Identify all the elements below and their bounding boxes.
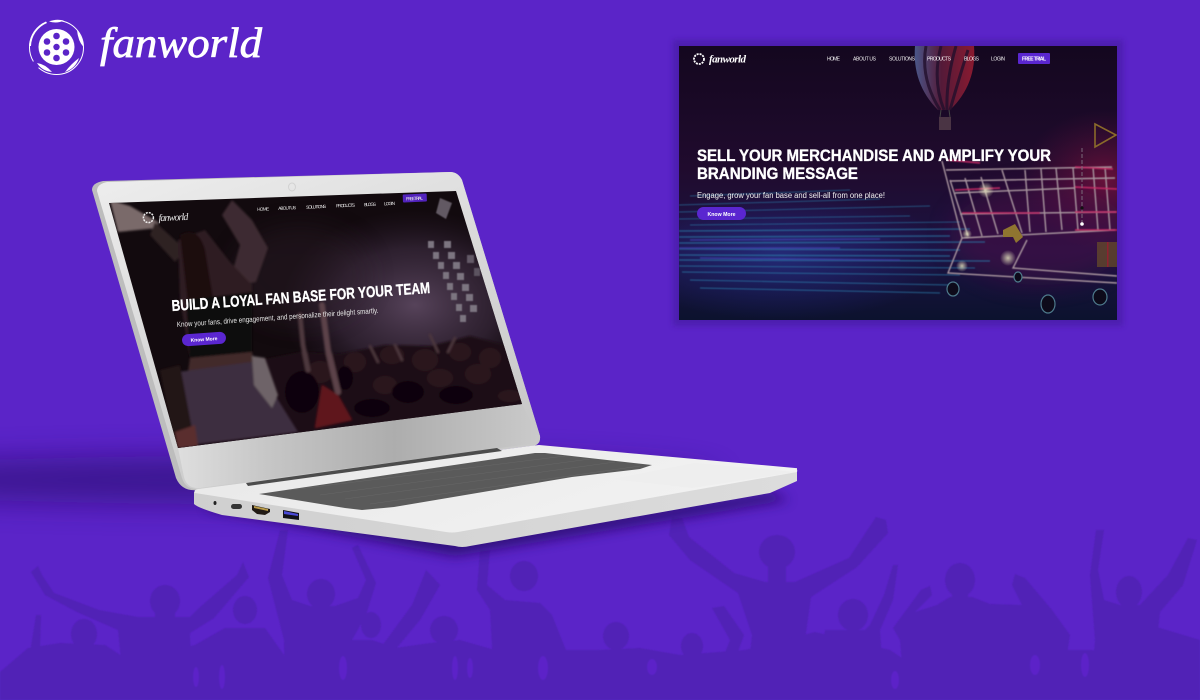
icon: film reel bbox=[29, 20, 84, 74]
black top bbox=[186, 292, 252, 358]
banner heading: SELL YOUR MERCHANDISE AND AMPLIFY YOUR bbox=[697, 147, 1051, 165]
shirt bbox=[178, 362, 298, 445]
laptop know more button: Know More bbox=[190, 336, 218, 344]
laptop site logo: fanworld bbox=[158, 212, 190, 224]
laptop site nav: LOGIN bbox=[384, 201, 395, 206]
banner nav: ABOUT US bbox=[853, 56, 877, 62]
laptop hero subtitle: Know your fans, drive engagement, and personalize their delight smartly. bbox=[177, 306, 379, 329]
flag bbox=[110, 200, 158, 232]
laptop know more button bbox=[182, 331, 226, 347]
banner free trial button: FREE TRIAL bbox=[1022, 56, 1046, 62]
banner nav: BLOGS bbox=[964, 56, 980, 62]
banner nav: HOME bbox=[827, 56, 841, 62]
fanworld logo bbox=[29, 20, 263, 74]
hinge bbox=[246, 448, 502, 486]
body bbox=[178, 230, 252, 358]
banner nav bbox=[827, 56, 1005, 62]
banner nav: SOLUTIONS bbox=[889, 56, 916, 62]
fan on shoulders bbox=[110, 200, 298, 448]
shopping cart bbox=[942, 160, 1117, 283]
cart parcels bbox=[1003, 224, 1023, 243]
crowd silhouette bbox=[0, 517, 1200, 700]
free trial button: FREE TRIAL bbox=[406, 196, 423, 201]
laptop bbox=[92, 172, 797, 556]
laptop site logo bbox=[143, 211, 190, 225]
audience bbox=[170, 305, 530, 455]
keyboard bbox=[259, 453, 652, 510]
laptop site nav: PRODUCTS bbox=[336, 203, 355, 208]
base top surface bbox=[194, 445, 797, 532]
banner heading: BRANDING MESSAGE bbox=[697, 165, 858, 183]
laptop site nav: BLOGS bbox=[364, 202, 376, 207]
banner nav: LOGIN bbox=[991, 56, 1005, 62]
webcam bbox=[288, 183, 296, 191]
banner nav: PRODUCTS bbox=[927, 56, 952, 62]
cart wheels bbox=[947, 272, 1107, 313]
lower bezel bbox=[178, 404, 538, 488]
stage haze bbox=[304, 223, 504, 354]
laptop hero heading: BUILD A LOYAL FAN BASE FOR YOUR TEAM bbox=[171, 280, 431, 315]
banner know more button bbox=[697, 207, 746, 220]
slider pager bbox=[1080, 148, 1084, 226]
banner logo: fanworld bbox=[709, 54, 746, 66]
lens flares bbox=[956, 182, 1016, 272]
laptop screen bbox=[109, 191, 522, 448]
free trial button bbox=[403, 193, 427, 203]
banner subtitle: Engage, grow your fan base and sell-all from one place! bbox=[697, 191, 885, 200]
laptop site nav: HOME bbox=[257, 206, 269, 212]
neon triangle bbox=[1095, 124, 1116, 147]
raised arms bbox=[300, 305, 455, 392]
banner know more button: Know More bbox=[708, 212, 736, 218]
hot air balloon bbox=[915, 46, 974, 130]
laptop base bbox=[194, 445, 797, 547]
ports bbox=[214, 501, 299, 520]
gift box bbox=[1097, 242, 1119, 267]
laptop ground shadow bbox=[0, 456, 720, 504]
website banner bbox=[672, 38, 1124, 328]
crowd gaps bbox=[193, 653, 1089, 689]
base shadow bbox=[205, 492, 790, 556]
trackpad bbox=[613, 463, 797, 488]
banner glow bbox=[673, 40, 1123, 326]
base front edge bbox=[194, 468, 797, 547]
wordmark: fanworld bbox=[100, 21, 263, 67]
laptop site nav: SOLUTIONS bbox=[306, 204, 326, 210]
arm bbox=[222, 200, 268, 288]
light streaks bbox=[679, 190, 990, 293]
banner heading bbox=[697, 147, 1051, 183]
laptop lid bbox=[92, 172, 550, 490]
stage lights bbox=[428, 198, 480, 322]
laptop site nav bbox=[143, 193, 427, 225]
banner free trial button bbox=[1018, 53, 1050, 64]
laptop site nav: ABOUT US bbox=[278, 205, 296, 211]
